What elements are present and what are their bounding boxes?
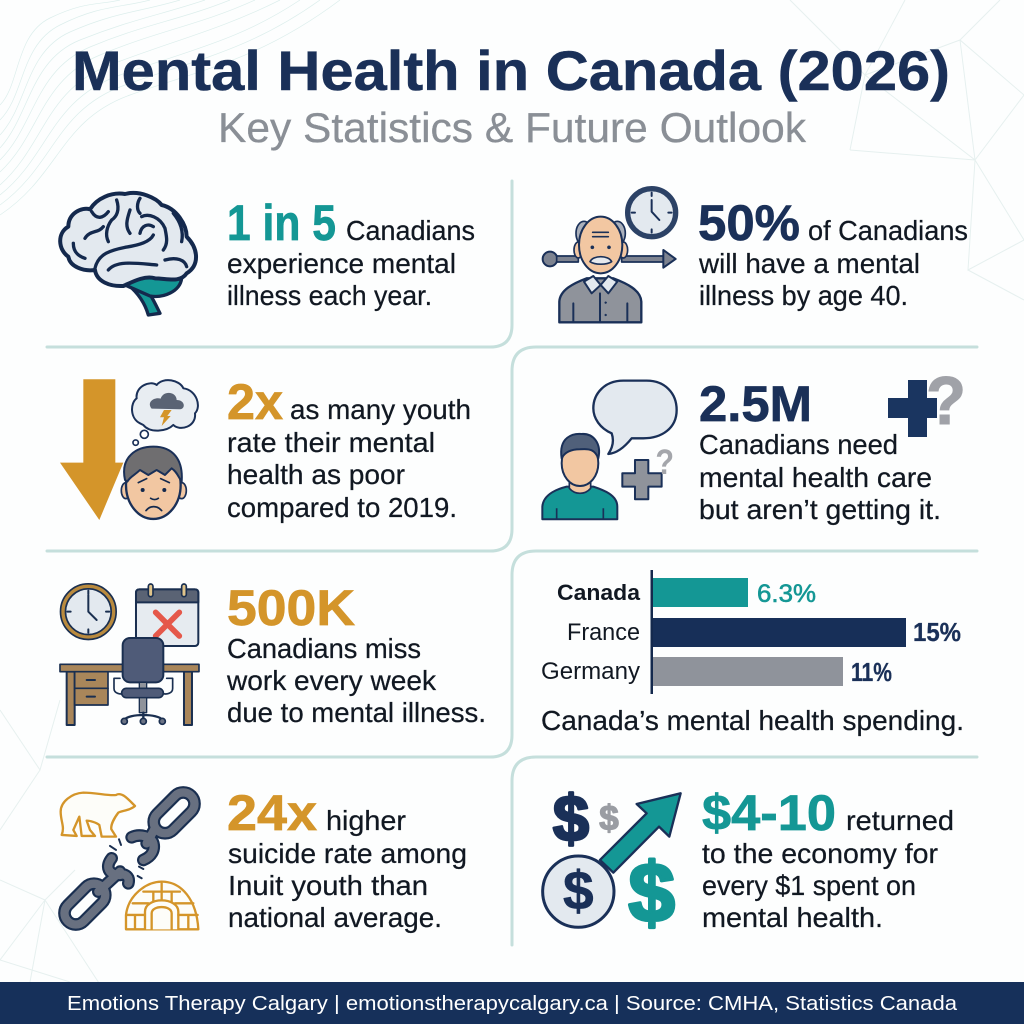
stat: 500K: 500K <box>227 580 355 636</box>
panel: bar chart of mental health spending <box>541 570 964 736</box>
icon: brain <box>60 193 196 315</box>
description: 24x: higher <box>326 805 406 836</box>
description: 1 in 5: illness each year. <box>227 280 432 311</box>
icon: down arrow and sad youth with storm cloud <box>60 379 198 520</box>
description: $4-10: to the economy for <box>702 838 938 869</box>
description: 2x: rate their mental <box>227 427 435 458</box>
description: 1 in 5: experience mental <box>227 248 456 279</box>
description: 500K: Canadians miss <box>227 633 421 664</box>
icon: dollar signs, coin and rising arrow: $ <box>628 847 675 940</box>
description: 2.5M: Canadians need <box>699 429 898 460</box>
panel: 2.5M <box>542 363 966 525</box>
stat: 50%: 50% <box>698 195 800 251</box>
icon: large medical cross with question mark: ? <box>926 363 966 439</box>
bar chart: 15% <box>913 617 961 647</box>
bar chart: 11% <box>851 657 892 687</box>
icon: dollar signs, coin and rising arrow: $ <box>553 781 589 854</box>
description: 24x: Inuit youth than <box>228 870 428 901</box>
icon: dollar signs, coin and rising arrow: $ <box>563 859 594 921</box>
description: 500K <box>226 633 486 728</box>
description: 1 in 5 <box>227 215 475 311</box>
panel: 1 in 5 <box>60 193 475 315</box>
description: 2x: as many youth <box>290 394 471 425</box>
description: 24x <box>228 805 467 933</box>
icon: empty desk with clock and crossed calendar <box>60 584 199 725</box>
description: $4-10 <box>702 805 954 933</box>
bar chart: Germany <box>541 658 640 685</box>
subtitle: Key Statistics & Future Outlook <box>218 104 807 151</box>
description: 1 in 5: Canadians <box>346 215 475 246</box>
description: 24x: suicide rate among <box>228 838 467 869</box>
icon: polar bear, broken chain and igloo <box>60 788 199 929</box>
description: 50%: illness by age 40. <box>699 280 908 311</box>
description: 2.5M: mental health care <box>699 462 932 493</box>
description: 50% <box>698 215 968 311</box>
icon: large medical cross with question mark <box>888 363 966 439</box>
footer bar <box>0 982 1024 1024</box>
bar chart: Canada <box>557 580 641 605</box>
stat: 2.5M: 2.5M <box>699 376 812 432</box>
description: 500K: work every week <box>226 665 437 696</box>
icon: dollar signs, coin and rising arrow <box>543 781 681 940</box>
bar chart: France <box>567 619 640 646</box>
panel: $4-10 <box>543 781 954 940</box>
bar chart: 6.3% <box>757 580 816 608</box>
stat: 1 in 5: 1 in 5 <box>227 195 336 251</box>
description: 2x <box>227 394 471 523</box>
description: $4-10: mental health. <box>702 902 883 933</box>
stat: 2x: 2x <box>227 374 283 430</box>
description: $4-10: every $1 spent on <box>702 870 916 901</box>
description: 50%: will have a mental <box>698 248 920 279</box>
description: 2.5M: but aren’t getting it. <box>699 494 941 525</box>
description: 2.5M <box>699 429 941 525</box>
description: 24x: national average. <box>228 902 442 933</box>
footer bar: Emotions Therapy Calgary | emotionstherapycalgary.ca | Source: CMHA, Statistics Canada <box>67 993 958 1015</box>
description: 50%: of Canadians <box>808 215 968 246</box>
panel: 2x <box>60 374 471 523</box>
icon: dollar signs, coin and rising arrow: $ <box>599 799 619 838</box>
icon: person with speech bubble and medical cross: ? <box>655 443 674 482</box>
description: 2x: health as poor <box>227 459 405 490</box>
description: 500K: due to mental illness. <box>227 697 486 728</box>
description: 2x: compared to 2019. <box>227 492 457 523</box>
panel: 24x <box>60 785 467 933</box>
stat: 24x: 24x <box>227 785 317 841</box>
panel: 50% <box>543 189 968 322</box>
stat: $4-10: $4-10 <box>702 785 836 841</box>
description: $4-10: returned <box>846 805 954 836</box>
icon: person with speech bubble and medical cross <box>542 381 677 519</box>
grid dividers <box>47 181 977 945</box>
bar chart <box>541 570 961 694</box>
panel: 500K <box>60 580 486 728</box>
title: Mental Health in Canada (2026) <box>72 39 950 102</box>
icon: older man with clock and timeline arrow <box>543 189 676 322</box>
chart caption: Canada’s mental health spending. <box>541 705 964 736</box>
